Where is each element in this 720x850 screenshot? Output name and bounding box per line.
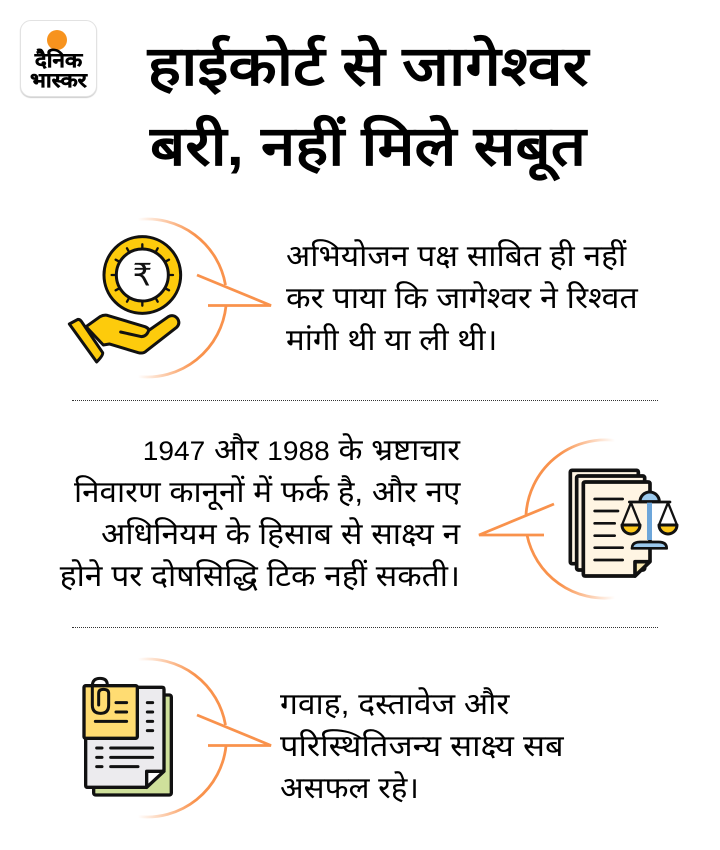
text lines [595, 499, 623, 560]
logo wordmark [30, 48, 88, 92]
icon: documents with scales [570, 470, 677, 576]
text: point 2 [60, 433, 461, 593]
logo: Dainik Bhaskar [20, 20, 97, 97]
divider [72, 627, 658, 628]
rupee symbol: ₹ [133, 258, 152, 294]
coin [104, 237, 181, 313]
title: हाईकोर्ट से जागेश्वर [148, 35, 588, 97]
paper clip [92, 686, 109, 713]
text: point 3: असफल रहे। [280, 772, 419, 805]
logo sun [47, 30, 67, 50]
scales [622, 492, 677, 548]
text: point 2: निवारण कानूनों में फर्क है, और नए [74, 476, 460, 509]
green back sheet [94, 695, 171, 795]
sticky note [84, 686, 137, 738]
logo wordmark: दैनिक [35, 50, 82, 72]
text: point 1: मांगी थी या ली थी। [286, 324, 497, 357]
callout arc and pointer 2 [479, 440, 615, 598]
text: point 1: अभियोजन पक्ष साबित ही नहीं [286, 240, 626, 273]
paper stack [570, 470, 650, 576]
title [146, 34, 590, 182]
text: point 2: 1947 और 1988 के भ्रष्टाचार [143, 434, 460, 467]
cuff [69, 319, 103, 362]
palm [86, 315, 179, 353]
icon: documents with paperclip [84, 678, 171, 795]
text: point 2: अधिनियम के हिसाब से साक्ष्य न [101, 518, 460, 551]
grey sheet [86, 687, 164, 787]
icon: hand holding rupee coin [69, 237, 181, 362]
logo wordmark: भास्कर [30, 70, 87, 92]
text: point 1: कर पाया कि जागेश्वर ने रिश्वत [286, 282, 638, 315]
callout arc and pointer 3 [138, 659, 271, 817]
divider [72, 400, 658, 401]
text: point 3: परिस्थितिजन्य साक्ष्य सब [280, 730, 564, 763]
finger [121, 329, 149, 337]
text: point 3: गवाह, दस्तावेज और [280, 688, 509, 721]
title: बरी, नहीं मिले सबूत [150, 115, 586, 177]
text: point 3 [280, 687, 564, 805]
text: point 1 [286, 239, 638, 357]
text: point 2: होने पर दोषसिद्धि टिक नहीं सकती। [60, 560, 460, 593]
callout arc and pointer 1 [138, 219, 271, 377]
note and sheet text lines [95, 703, 153, 767]
